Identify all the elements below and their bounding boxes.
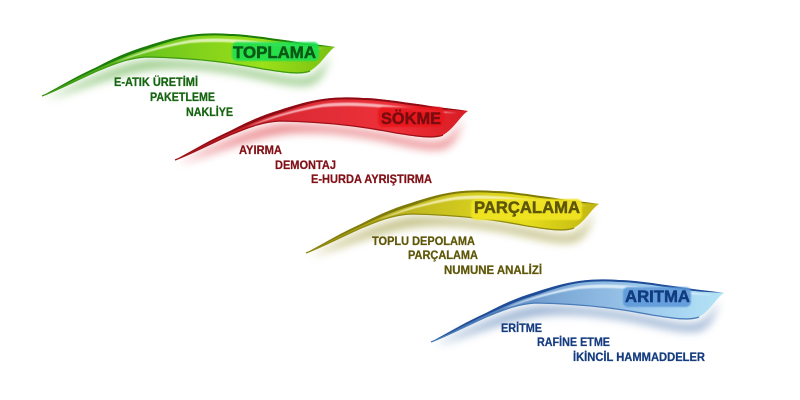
list: SÖKME steps: DEMONTAJ	[275, 160, 336, 172]
list: PARÇALAMA steps: TOPLU DEPOLAMA	[372, 236, 475, 248]
swoosh: ARITMA	[431, 279, 724, 345]
list: SÖKME steps: AYIRMA	[239, 145, 282, 157]
list: PARÇALAMA steps: PARÇALAMA	[408, 250, 478, 262]
list: PARÇALAMA steps: NUMUNE ANALİZİ	[444, 264, 542, 277]
list: ARITMA steps	[501, 322, 706, 364]
list: ARITMA steps: İKİNCİL HAMMADDELER	[573, 351, 706, 364]
list: SÖKME steps	[239, 145, 432, 186]
label: SÖKME: SÖKME	[381, 109, 441, 128]
swoosh: SÖKME	[175, 97, 468, 163]
label: PARÇALAMA: PARÇALAMA	[474, 198, 580, 217]
list: TOPLAMA steps: PAKETLEME	[150, 92, 215, 104]
label: TOPLAMA: TOPLAMA	[233, 43, 316, 62]
list: TOPLAMA steps: E-ATIK ÜRETİMİ	[114, 76, 198, 89]
list: ARITMA steps: RAFİNE ETME	[537, 336, 610, 349]
list: ARITMA steps: ERİTME	[501, 322, 542, 335]
list: TOPLAMA steps	[114, 76, 233, 119]
list: TOPLAMA steps: NAKLİYE	[186, 106, 233, 119]
list: PARÇALAMA steps	[372, 236, 542, 277]
label: ARITMA: ARITMA	[625, 287, 690, 306]
list: SÖKME steps: E-HURDA AYRIŞTIRMA	[311, 174, 432, 186]
swoosh: PARÇALAMA	[306, 190, 599, 256]
swoosh: TOPLAMA	[42, 33, 335, 99]
